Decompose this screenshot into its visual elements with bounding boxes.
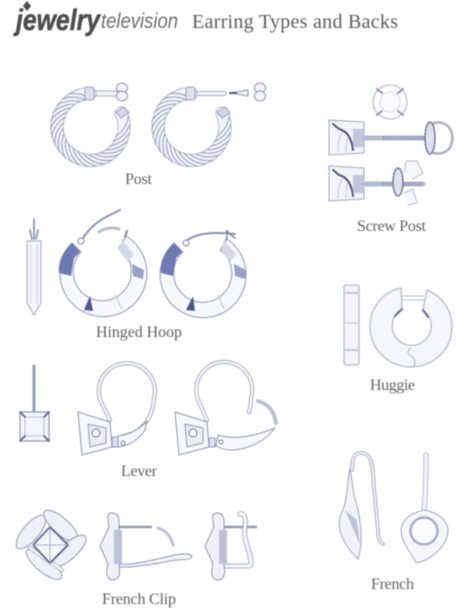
illustration: lever <box>20 362 276 455</box>
illustration: huggie <box>344 285 452 367</box>
label: hinged hoop: Hinged Hoop <box>96 324 182 341</box>
assembled stud <box>329 120 452 155</box>
label: french: French <box>371 576 414 593</box>
illustration: french clip <box>11 505 256 584</box>
front view <box>11 505 91 584</box>
arrow <box>258 401 276 423</box>
side view closed <box>205 513 256 580</box>
label: huggie: Huggie <box>370 377 415 394</box>
side view open <box>100 513 192 580</box>
open hoop <box>59 210 147 317</box>
arrow <box>158 528 173 545</box>
logo: jewelry <box>13 4 101 37</box>
illustration: screw post <box>329 85 452 205</box>
illustration: post <box>48 83 266 170</box>
top stone <box>373 85 407 119</box>
ring <box>370 288 452 367</box>
label: post: Post <box>125 171 153 188</box>
side bar <box>344 285 359 365</box>
title: Earring Types and Backs <box>192 11 398 33</box>
label: screw post: Screw Post <box>357 218 427 235</box>
side view <box>27 219 41 315</box>
hoop with separated back <box>149 83 266 170</box>
stud with loose back <box>329 161 423 205</box>
side view <box>339 453 383 559</box>
label: lever: Lever <box>121 463 158 480</box>
illustration: french <box>339 453 448 563</box>
hoop with stud back <box>48 83 132 170</box>
logo <box>13 1 178 37</box>
closed lever <box>78 363 155 455</box>
illustration: hinged hoop <box>27 210 246 318</box>
front view <box>401 455 448 563</box>
front stud <box>20 366 49 441</box>
label: french clip: French Clip <box>102 591 176 608</box>
logo: television <box>101 10 178 33</box>
closed hoop <box>160 231 246 318</box>
open lever <box>175 362 275 455</box>
